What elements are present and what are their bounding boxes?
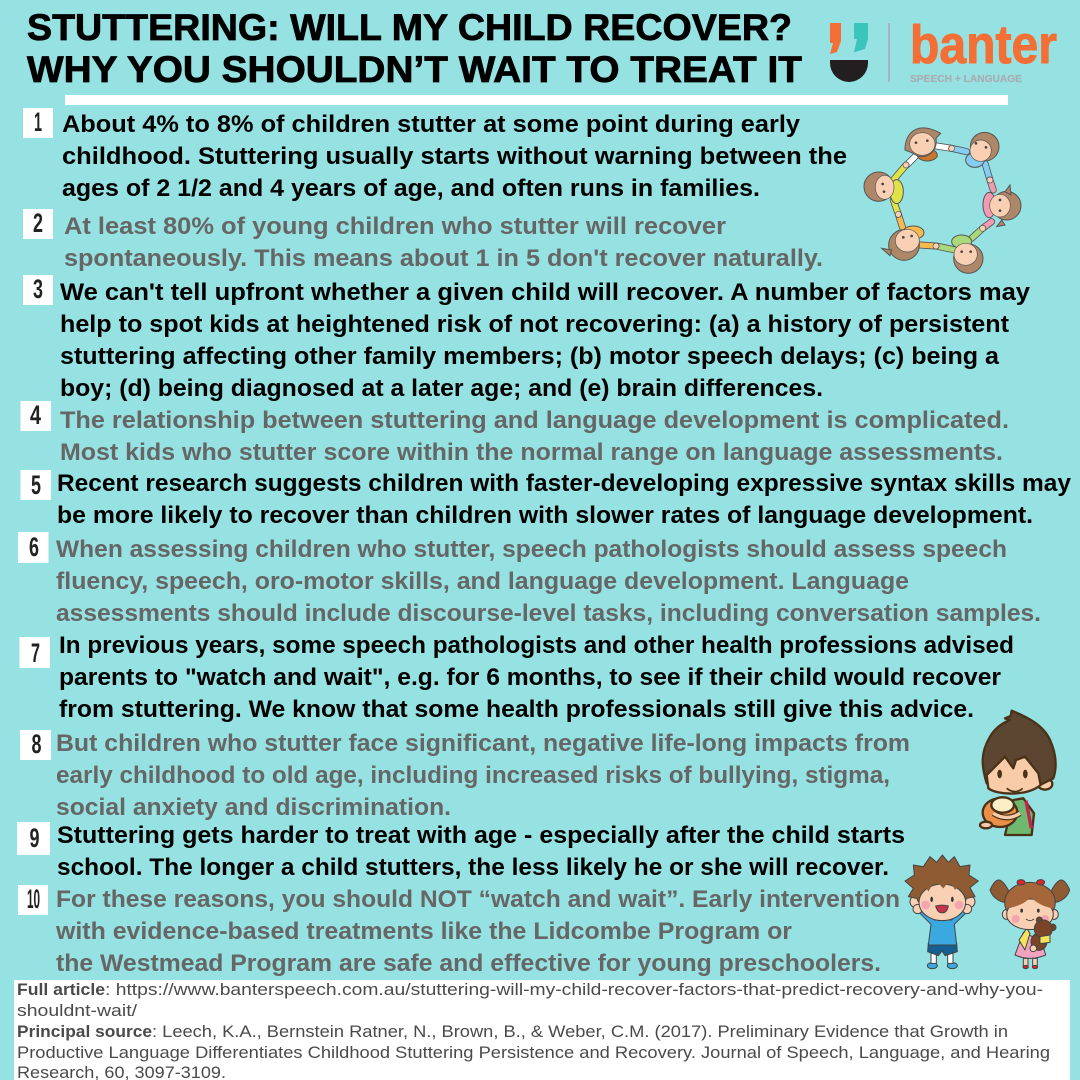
text 2: At least 80% of young children who stutter will recover <box>64 213 726 240</box>
title divider bar <box>65 95 1008 105</box>
logo: banter speech and language: SPEECH + LANGUAGE <box>910 73 1022 85</box>
text 3: help to spot kids at heightened risk of not recovering: (a) a history of persistent <box>60 311 1009 338</box>
logo: banter speech and language <box>830 15 1057 85</box>
number badge 8: 8 <box>32 729 42 759</box>
number badge 9: 9 <box>30 823 40 853</box>
text 9: Stuttering gets harder to treat with age - especially after the child starts <box>57 822 905 849</box>
number badge 1 <box>23 107 53 138</box>
text 4: Most kids who stutter score within the normal range on language assessments. <box>60 439 1003 466</box>
text 10: with evidence-based treatments like the Lidcombe Program or <box>55 918 792 945</box>
text 5 <box>57 470 1071 529</box>
text 9 <box>57 822 905 881</box>
text 1: About 4% to 8% of children stutter at some point during early <box>62 111 800 138</box>
number badge 4: 4 <box>30 400 41 430</box>
text 7: parents to "watch and wait", e.g. for 6 months, to see if their child would recover <box>59 664 1001 691</box>
footer: sources <box>14 980 1070 1080</box>
text 3: boy; (d) being diagnosed at a later age; and (e) brain differences. <box>60 375 823 402</box>
text 10: For these reasons, you should NOT “watch and wait”. Early intervention <box>56 886 900 913</box>
text 7: In previous years, some speech pathologists and other health professions advised <box>59 632 1014 659</box>
text 7 <box>59 632 1014 723</box>
item 3 <box>23 274 1030 402</box>
title: WHY YOU SHOULDN’T WAIT TO TREAT IT <box>27 48 802 90</box>
text 7: from stuttering. We know that some health professionals still give this advice. <box>59 696 974 723</box>
item 8 <box>20 729 910 821</box>
item 1 <box>23 107 847 202</box>
item 6 <box>18 532 1041 627</box>
icon: cheering boy with spiky hair <box>905 855 978 969</box>
text 6: fluency, speech, oro-motor skills, and language development. Language <box>56 568 909 595</box>
number badge 9 <box>17 822 50 855</box>
footer: sources: Full article <box>17 980 105 999</box>
text 2: spontaneously. This means about 1 in 5 don't recover naturally. <box>64 245 823 272</box>
item 4 <box>20 400 1009 466</box>
number badge 5: 5 <box>31 470 41 500</box>
number badge 10: 10 <box>27 884 40 914</box>
icon: girl with pigtails holding a teddy bear <box>990 880 1070 969</box>
text 4: The relationship between stuttering and language development is complicated. <box>60 407 1009 434</box>
number badge 8 <box>20 729 51 760</box>
number badge 7 <box>20 637 50 668</box>
footer: sources: : https://www.banterspeech.com.au/stuttering-will-my-child-recover-factors-that-predict-recovery-and-why-you- <box>105 980 1043 999</box>
number badge 3 <box>23 274 53 305</box>
item 10 <box>18 884 900 977</box>
footer: sources: : Leech, K.A., Bernstein Ratner, N., Brown, B., & Weber, C.M. (2017). Preliminary Evidence that Growth in <box>152 1022 1008 1041</box>
number badge 1: 1 <box>34 107 42 137</box>
title <box>27 6 802 90</box>
text 8: social anxiety and discrimination. <box>56 794 451 821</box>
number badge 4 <box>20 400 51 431</box>
item 2 <box>23 208 823 272</box>
text 6: When assessing children who stutter, speech pathologists should assess speech <box>56 536 1007 563</box>
footer: sources: Productive Language Differentiates Childhood Stuttering Persistence and Recovery. Journal of Speech, Language, and Hearing <box>17 1043 1050 1062</box>
text 8: But children who stutter face significant, negative life-long impacts from <box>56 730 910 757</box>
text 1: childhood. Stuttering usually starts without warning between the <box>62 143 847 170</box>
text 2 <box>64 213 823 272</box>
text 1 <box>62 111 847 202</box>
logo: banter speech and language: banter <box>910 15 1057 75</box>
text 5: Recent research suggests children with faster-developing expressive syntax skills may <box>57 470 1071 497</box>
item 5 <box>20 470 1071 529</box>
number badge 7: 7 <box>31 638 40 668</box>
text 3 <box>60 279 1030 402</box>
text 3: We can't tell upfront whether a given child will recover. A number of factors may <box>60 279 1030 306</box>
number badge 6: 6 <box>29 532 39 562</box>
icon: boy holding a hamster <box>980 711 1056 835</box>
text 10 <box>55 886 900 977</box>
number badge 6 <box>18 532 48 563</box>
text 10: the Westmead Program are safe and effective for young preschoolers. <box>56 950 881 977</box>
number badge 10 <box>18 884 48 915</box>
number badge 5 <box>20 470 51 500</box>
number badge 2: 2 <box>33 208 43 238</box>
text 1: ages of 2 1/2 and 4 years of age, and often runs in families. <box>62 175 760 202</box>
text 6: assessments should include discourse-level tasks, including conversation samples. <box>56 600 1041 627</box>
number badge 3: 3 <box>33 274 43 304</box>
item 9 <box>17 822 905 881</box>
text 8 <box>56 730 910 821</box>
text 5: be more likely to recover than children with slower rates of language development. <box>57 502 1033 529</box>
text 4 <box>60 407 1009 466</box>
footer: sources: shouldnt-wait/ <box>17 1001 137 1020</box>
text 6 <box>56 536 1041 627</box>
footer: sources: Principal source <box>17 1022 152 1041</box>
item 7 <box>20 632 1014 723</box>
number badge 2 <box>23 208 53 239</box>
text 9: school. The longer a child stutters, the less likely he or she will recover. <box>57 854 889 881</box>
title: STUTTERING: WILL MY CHILD RECOVER? <box>27 6 792 48</box>
text 8: early childhood to old age, including increased risks of bullying, stigma, <box>56 762 890 789</box>
icon: children holding hands in a circle <box>864 128 1021 273</box>
text 3: stuttering affecting other family members; (b) motor speech delays; (c) being a <box>60 343 999 370</box>
